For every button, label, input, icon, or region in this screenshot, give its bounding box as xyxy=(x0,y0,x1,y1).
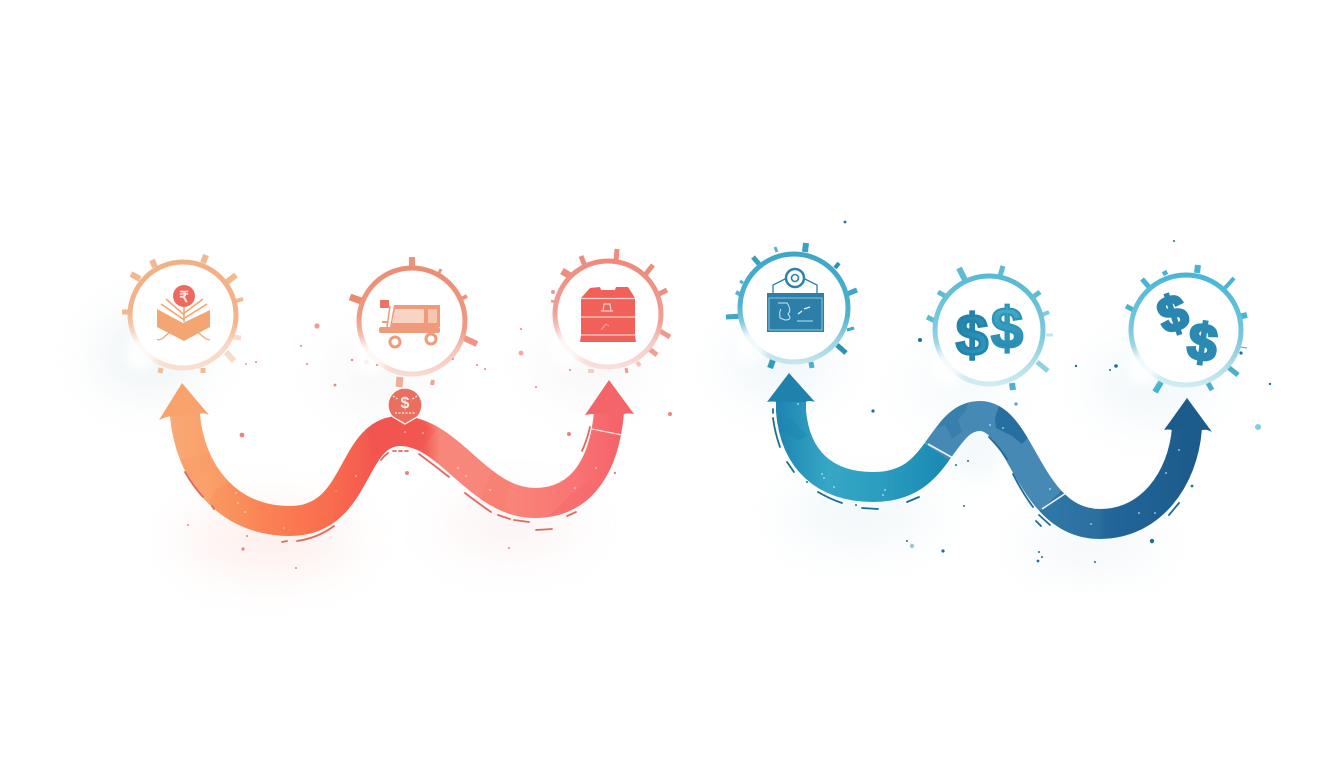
ring fade xyxy=(931,349,963,385)
crest and shaft patches xyxy=(775,396,1180,525)
arrow head: left xyxy=(159,383,209,420)
segment line xyxy=(592,429,622,435)
icon: dollar signs: $ xyxy=(991,296,1023,361)
band segment 1 xyxy=(791,398,937,487)
icon: tilted dollar signs xyxy=(1151,283,1221,374)
icon: dollar signs xyxy=(956,296,1023,368)
icon: tilted dollar signs: $ xyxy=(1184,312,1221,374)
icon: tilted dollar signs: $ xyxy=(1151,283,1195,345)
marker badge on crest: $ xyxy=(401,395,410,412)
node 2: truck icon circle xyxy=(350,257,477,387)
ring fade xyxy=(125,335,157,371)
node 3: crate icon circle xyxy=(550,249,670,373)
arrow head: right xyxy=(585,380,634,415)
node 1: book icon circle xyxy=(122,255,243,373)
paint specks: blue side xyxy=(806,221,1271,563)
panel: red wave arrow xyxy=(159,380,634,542)
band segment 3 xyxy=(1050,422,1188,524)
ring fade xyxy=(1127,350,1159,386)
icon: dollar signs: $ xyxy=(956,303,988,368)
icon: crate xyxy=(580,287,636,342)
icon: cart truck xyxy=(379,300,440,347)
ring fade xyxy=(736,327,768,363)
dashed accent line xyxy=(773,409,1179,526)
panel: blue wave arrow xyxy=(767,373,1212,526)
arrow head: right xyxy=(1164,398,1212,432)
ring fade xyxy=(354,340,386,376)
ring fade xyxy=(550,332,582,368)
node 6: tilted dollar icon circle xyxy=(1126,265,1247,392)
band segment 2 xyxy=(937,416,1050,501)
node 4: signboard icon circle xyxy=(726,243,857,368)
dashed accent line xyxy=(185,427,590,542)
wave band: orange to red xyxy=(183,402,610,521)
paint specks: red side xyxy=(187,323,672,569)
node 5: double dollar icon circle xyxy=(927,266,1053,390)
segment lines xyxy=(928,444,1066,509)
icon: open book with coin: ₹ xyxy=(179,289,189,306)
soft shadows xyxy=(95,315,1205,566)
arrow head: left xyxy=(767,373,815,402)
marker badge on crest xyxy=(388,388,422,424)
icon: hanging signboard xyxy=(767,269,824,332)
mottled patches xyxy=(180,416,597,529)
